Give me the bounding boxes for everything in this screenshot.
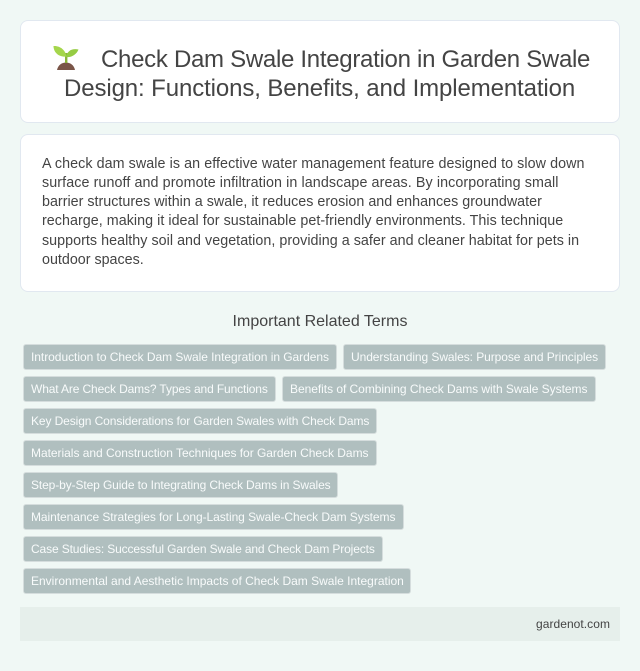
tag bbox=[23, 568, 411, 594]
tag: Key Design Considerations for Garden Swales with Check Dams bbox=[31, 414, 369, 428]
intro paragraph text: surface runoff and promote infiltration in landscape areas. By incorporating small bbox=[42, 175, 559, 191]
title: Design: Functions, Benefits, and Implementation bbox=[64, 75, 575, 102]
tag: Case Studies: Successful Garden Swale and Check Dam Projects bbox=[31, 542, 375, 556]
intro paragraph text: outdoor spaces. bbox=[42, 252, 144, 268]
related terms tags bbox=[23, 344, 606, 594]
footer bar bbox=[20, 607, 620, 641]
tag bbox=[23, 536, 383, 562]
tag bbox=[23, 376, 276, 402]
intro paragraph text bbox=[42, 156, 585, 268]
tag: Benefits of Combining Check Dams with Swale Systems bbox=[290, 382, 587, 396]
tag: Materials and Construction Techniques for Garden Check Dams bbox=[31, 446, 369, 460]
tag: Understanding Swales: Purpose and Principles bbox=[351, 350, 598, 364]
tag bbox=[23, 472, 338, 498]
related terms heading: Important Related Terms bbox=[233, 313, 407, 330]
tag: Introduction to Check Dam Swale Integration in Gardens bbox=[31, 350, 329, 364]
header card bbox=[20, 20, 620, 123]
intro paragraph card bbox=[20, 134, 620, 292]
tag: What Are Check Dams? Types and Functions bbox=[31, 382, 268, 396]
tag bbox=[23, 504, 404, 530]
tag bbox=[282, 376, 596, 402]
title bbox=[64, 46, 590, 102]
tag: Maintenance Strategies for Long-Lasting Swale-Check Dam Systems bbox=[31, 510, 395, 524]
intro paragraph text: recharge, making it ideal for sustainable pet-friendly environments. This technique bbox=[42, 213, 563, 229]
intro paragraph text: supports healthy soil and vegetation, providing a safer and cleaner habitat for pets in bbox=[42, 233, 579, 249]
tag bbox=[23, 440, 377, 466]
footer site name: gardenot.com bbox=[536, 617, 610, 631]
tag bbox=[343, 344, 606, 370]
tag: Environmental and Aesthetic Impacts of Check Dam Swale Integration bbox=[31, 574, 404, 588]
title: Check Dam Swale Integration in Garden Swale bbox=[101, 46, 590, 73]
tag bbox=[23, 408, 377, 434]
tag: Step-by-Step Guide to Integrating Check Dams in Swales bbox=[31, 478, 331, 492]
icon: seedling bbox=[54, 46, 78, 70]
tag bbox=[23, 344, 337, 370]
intro paragraph text: A check dam swale is an effective water management feature designed to slow down bbox=[42, 156, 585, 172]
intro paragraph text: barrier structures within a swale, it reduces erosion and enhances groundwater bbox=[42, 194, 542, 210]
